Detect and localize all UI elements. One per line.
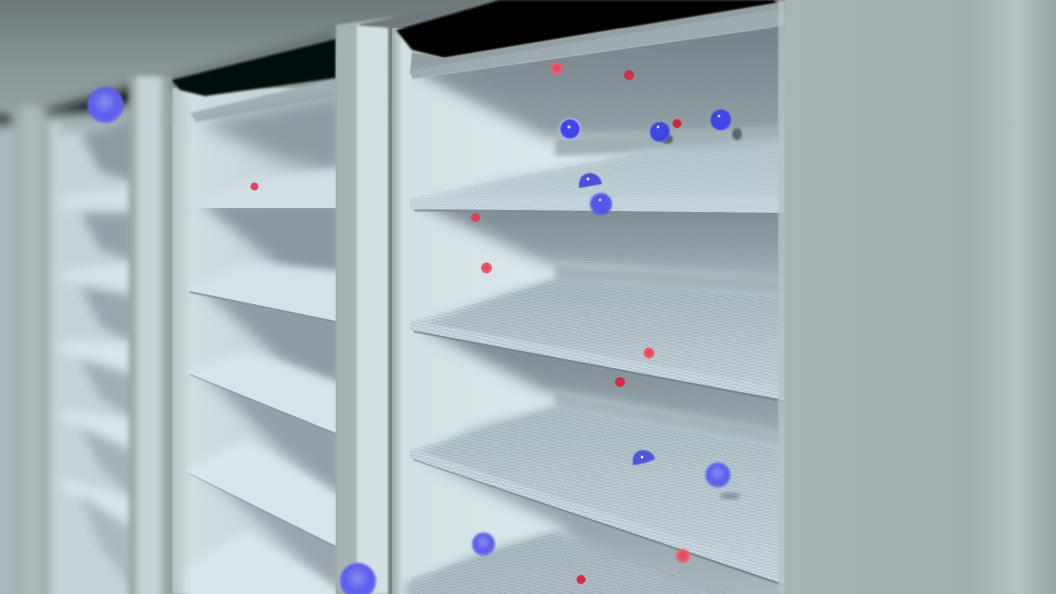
red particle <box>615 377 625 387</box>
louvre 2 underside <box>413 209 784 279</box>
blue droplet on shelf 2 <box>579 173 602 188</box>
louvre 4 back ridge <box>552 394 779 446</box>
blue droplet on shelf 1 <box>650 122 673 144</box>
red particle <box>551 62 563 74</box>
particles: red spheres <box>250 62 690 584</box>
louvre 4 <box>203 352 336 433</box>
blue droplet on shelf 4 <box>633 450 655 465</box>
louvre 3 underside <box>413 330 784 433</box>
black opening <box>396 0 775 58</box>
red particle <box>672 119 682 128</box>
strip: right edge of main bay <box>778 0 786 594</box>
panel: third bay <box>48 90 134 594</box>
louvre 1 underside <box>416 27 784 146</box>
panel: centre pillar <box>336 0 500 594</box>
louvre 3 surface <box>410 276 780 398</box>
louvre 2 surface <box>410 138 779 213</box>
blue droplet on shelf 1 right <box>710 110 742 140</box>
red particle <box>576 575 586 584</box>
blue sphere, right <box>706 462 740 500</box>
red particle <box>676 549 690 563</box>
red particle <box>250 182 258 190</box>
red particle <box>471 213 480 222</box>
louvre 6 <box>186 530 345 594</box>
louvre 2 <box>254 166 336 208</box>
louvre ledge <box>190 79 336 122</box>
underside 1 <box>202 92 336 172</box>
louvre 3 <box>222 261 336 321</box>
panel: middle bay <box>172 39 345 594</box>
blue sphere at shelf 2 edge <box>590 193 612 215</box>
panel: right wall <box>785 0 1056 594</box>
louvre 4 surface <box>410 404 780 582</box>
blue sphere, far left <box>88 87 124 123</box>
panel: far left bay <box>0 106 46 594</box>
louvre 5 <box>196 440 336 546</box>
panel: main bay with louvres <box>391 0 800 594</box>
red particle <box>481 262 492 274</box>
louvre 2 back ridge <box>555 126 790 156</box>
blue sphere, lower <box>472 532 495 556</box>
panel: pillar between third and middle bay <box>129 76 171 594</box>
louvre 1 front band <box>410 8 784 79</box>
louvre 4 underside <box>412 452 800 594</box>
black opening <box>172 39 336 96</box>
louvre 3 back ridge <box>552 264 779 296</box>
red particle <box>624 70 634 80</box>
red particle <box>644 348 654 358</box>
strip behind louvre 1 <box>410 2 784 74</box>
blue sphere at pillar base <box>340 563 376 594</box>
louvre 5 surface <box>404 530 760 594</box>
particles: blue spheres <box>88 87 742 594</box>
blue sphere, ringed <box>560 118 580 140</box>
